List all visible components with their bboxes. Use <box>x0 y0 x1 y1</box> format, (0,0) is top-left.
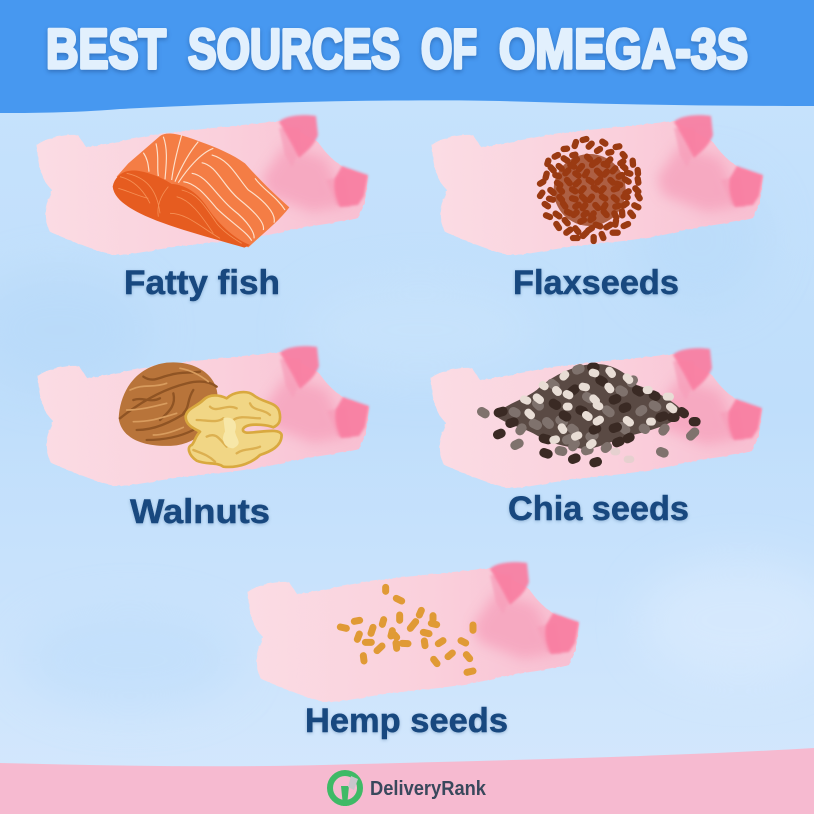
title: OF <box>421 17 477 80</box>
walnut shell <box>119 362 217 446</box>
title: SOURCES <box>188 17 400 80</box>
title: BEST <box>46 17 166 80</box>
panel: fatty fish <box>37 115 368 302</box>
label: Flaxseeds <box>513 264 679 302</box>
brush stroke <box>431 348 762 488</box>
title <box>46 17 748 80</box>
label: Hemp seeds <box>305 702 508 740</box>
panel: hemp seeds <box>248 562 579 740</box>
background watercolor wash <box>0 170 814 710</box>
icon: hemp seeds <box>340 587 473 672</box>
brush stroke <box>432 115 763 255</box>
label: Walnuts <box>130 493 270 531</box>
brush stroke <box>37 115 368 255</box>
header banner <box>0 0 814 113</box>
label: Chia seeds <box>508 490 689 528</box>
brush stroke <box>38 346 369 486</box>
panel: flaxseeds <box>432 115 763 302</box>
icon: chia seeds <box>482 364 696 463</box>
walnut kernel <box>186 392 282 467</box>
label: Fatty fish <box>124 264 280 302</box>
icon: fork and spoon badge <box>330 773 360 806</box>
icon: salmon fillet <box>113 134 289 248</box>
icon: walnut <box>119 362 282 467</box>
panel: chia seeds <box>431 348 762 528</box>
logo <box>330 773 487 806</box>
title: OMEGA-3S <box>499 17 748 80</box>
brush stroke <box>248 562 579 702</box>
wordmark: DeliveryRank <box>370 778 487 800</box>
footer band <box>0 748 814 814</box>
icon: flaxseeds <box>540 139 640 241</box>
panel: walnuts <box>38 346 369 531</box>
